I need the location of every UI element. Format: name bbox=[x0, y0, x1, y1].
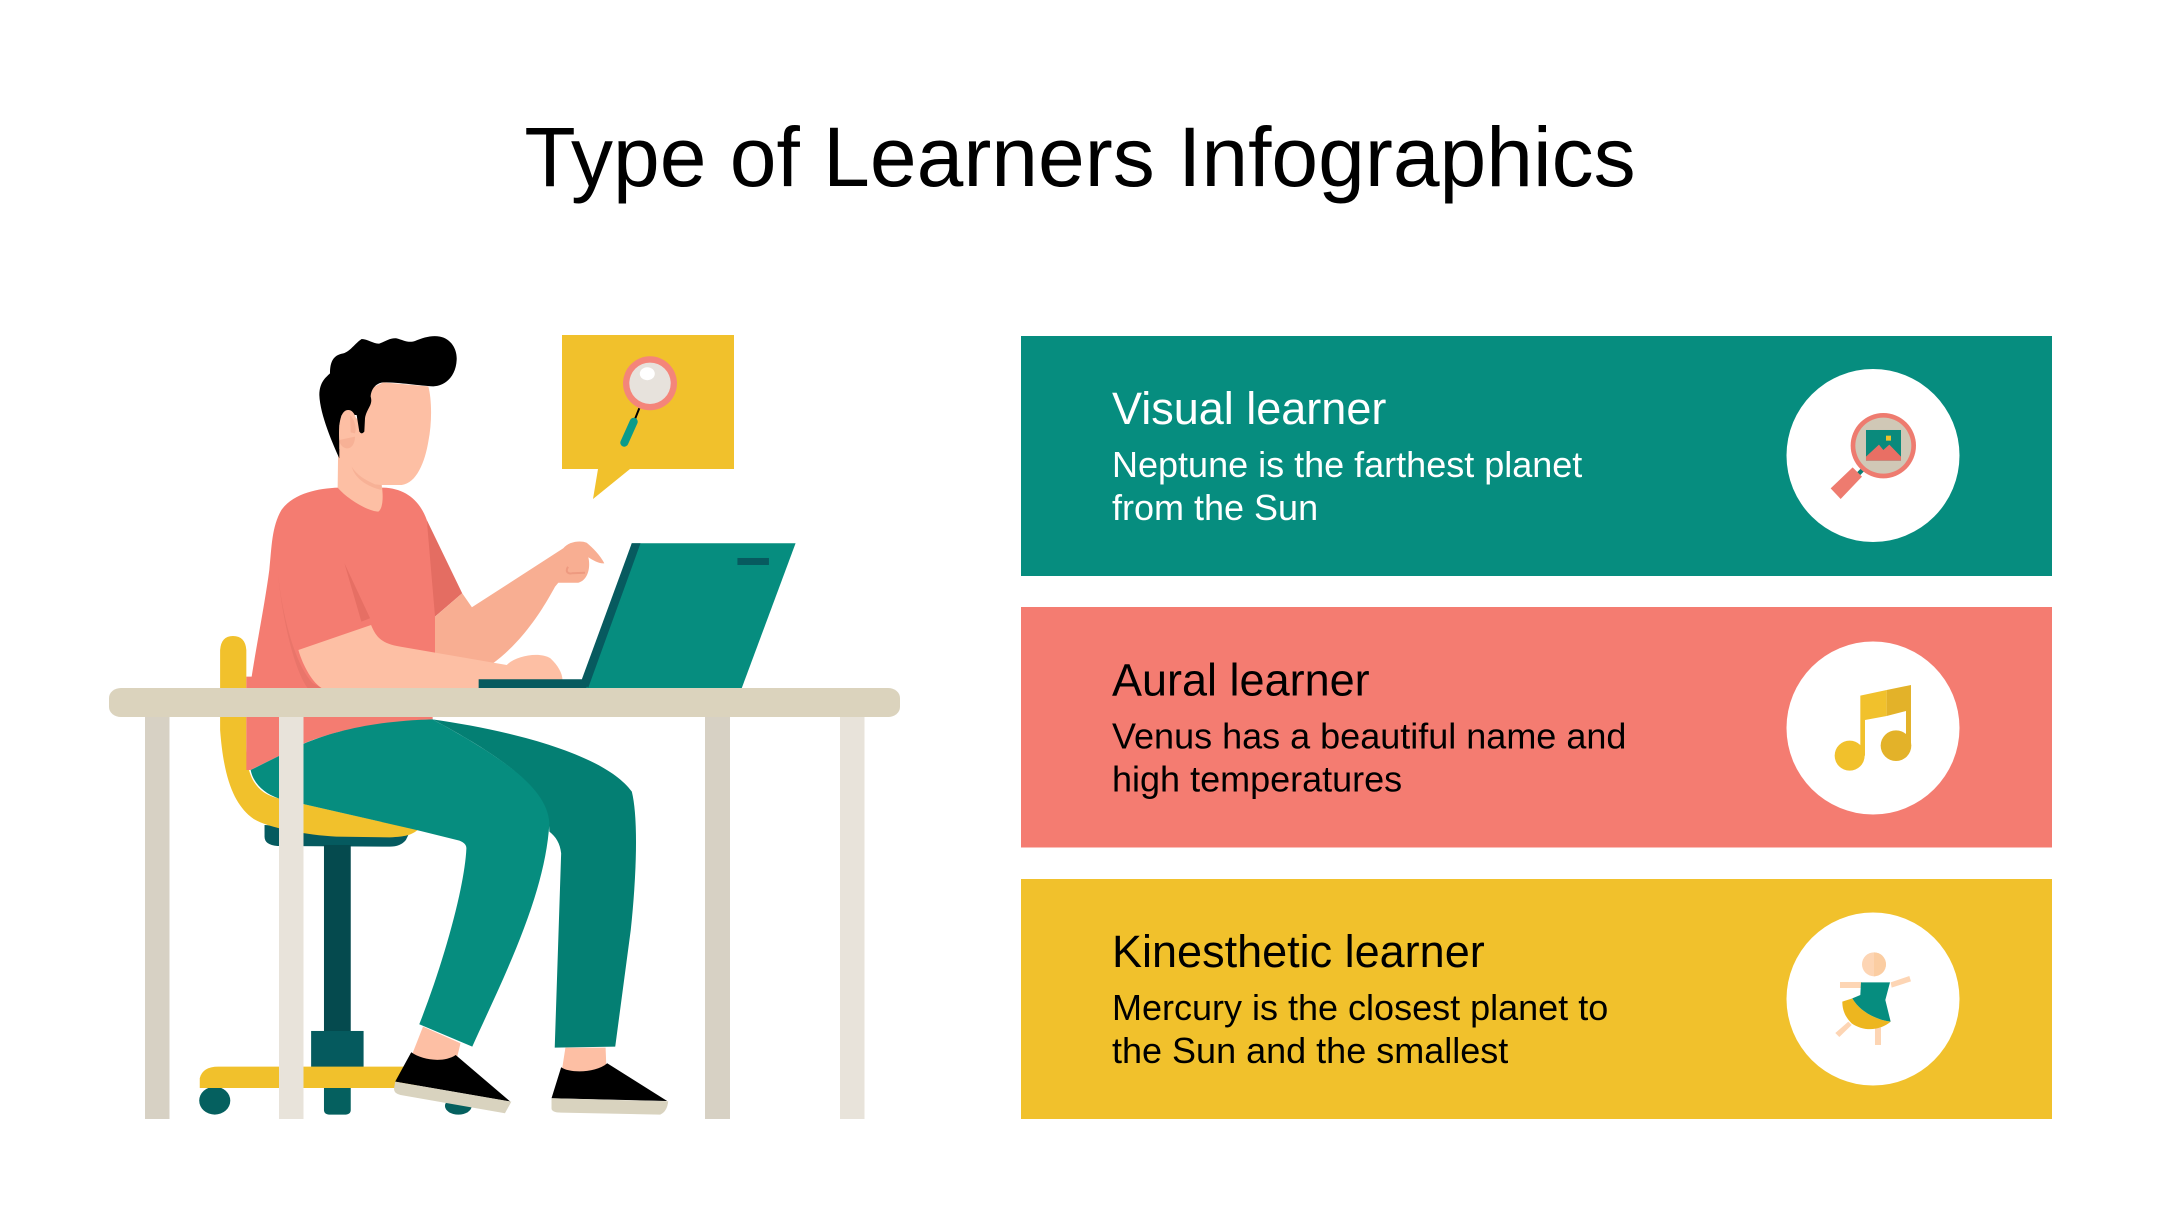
head bbox=[319, 336, 457, 512]
shoes and ankles bbox=[394, 1027, 668, 1115]
icon: music note bbox=[1786, 642, 1960, 814]
head, neck, hair and arms bbox=[298, 336, 604, 689]
heading: visual learner: Visual learner bbox=[1112, 383, 1386, 434]
text block: aural learner: high temperatures bbox=[1112, 758, 1402, 800]
title: Type of Learners Infographics bbox=[524, 110, 1636, 204]
heading: aural learner: Aural learner bbox=[1112, 654, 1370, 706]
panel: kinesthetic learner bbox=[1021, 879, 2052, 1119]
panel: aural learner bbox=[1021, 607, 2052, 848]
icon: magnifying glass bbox=[623, 356, 677, 443]
text block: kinesthetic learner: Mercury is the closest planet to bbox=[1112, 987, 1608, 1028]
office chair bbox=[199, 636, 472, 1115]
text block: visual learner: from the Sun bbox=[1112, 487, 1318, 528]
desk bbox=[109, 688, 900, 1119]
text block: aural learner bbox=[1112, 716, 1626, 800]
text block: visual learner: Neptune is the farthest planet bbox=[1112, 444, 1582, 485]
text block: kinesthetic learner: the Sun and the smallest bbox=[1112, 1030, 1508, 1071]
laptop bbox=[479, 543, 796, 688]
speech bubble with magnifying glass bbox=[562, 335, 734, 499]
text block: kinesthetic learner bbox=[1112, 987, 1608, 1071]
illustration: person at desk bbox=[109, 336, 900, 1119]
far arm and hand bbox=[435, 541, 604, 664]
t-shirt bbox=[246, 488, 462, 770]
heading: kinesthetic learner: Kinesthetic learner bbox=[1112, 926, 1485, 977]
icon: dancer bbox=[1786, 912, 1960, 1086]
icon: magnifier over picture bbox=[1786, 369, 1960, 542]
text block: visual learner bbox=[1112, 444, 1582, 528]
text block: aural learner: Venus has a beautiful name and bbox=[1112, 716, 1626, 756]
trousers bbox=[251, 719, 636, 1048]
panel: visual learner bbox=[1021, 336, 2052, 576]
near arm bbox=[298, 625, 562, 689]
